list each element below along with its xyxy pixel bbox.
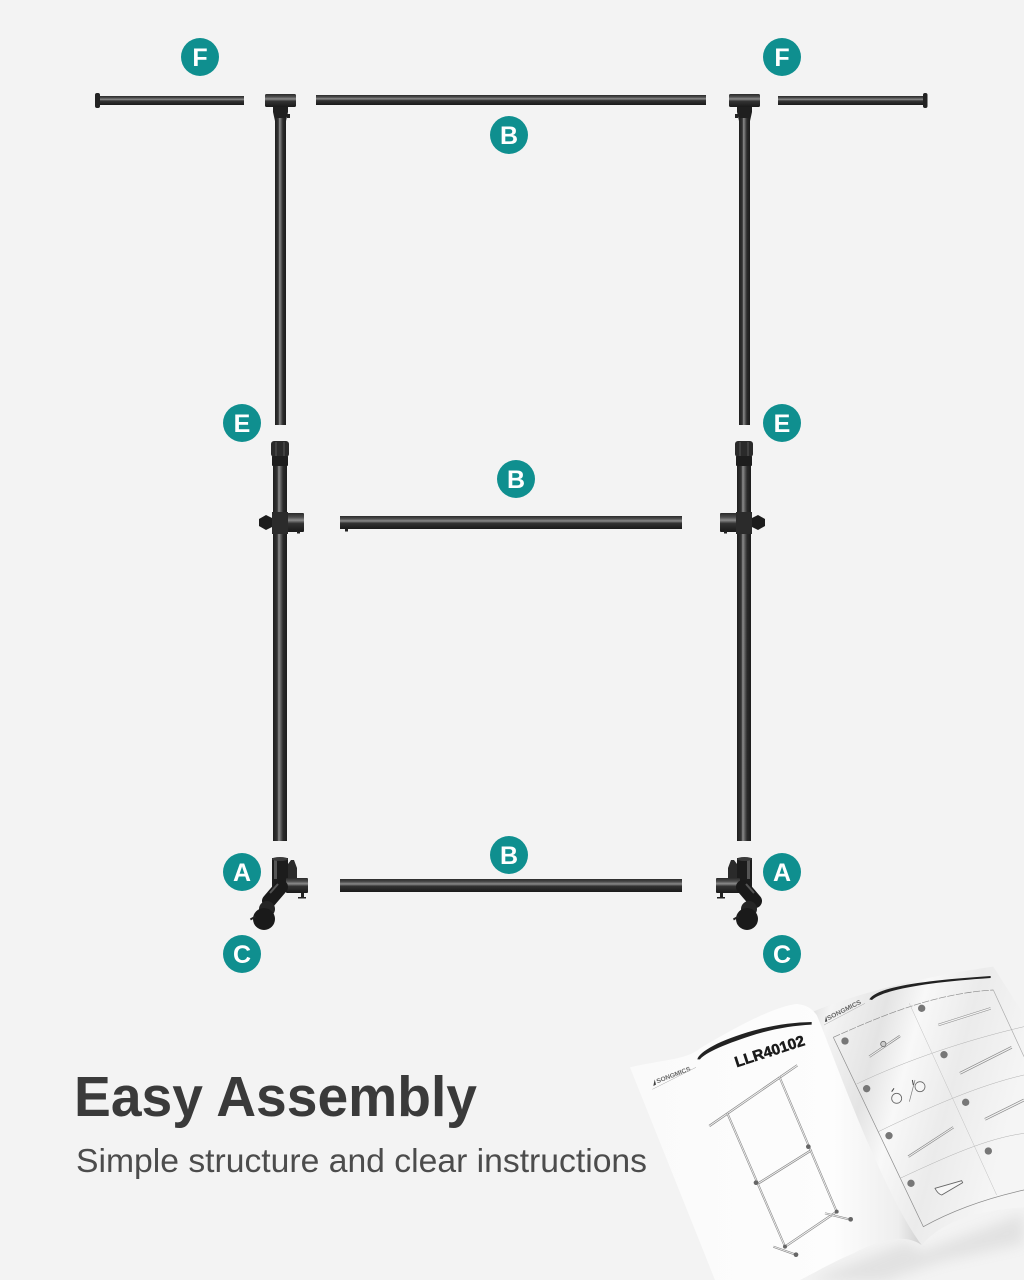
badge A right — [763, 853, 801, 891]
rack part F: left top extension — [95, 93, 244, 108]
rack part: right T joint — [729, 94, 760, 121]
badge E right: E — [774, 410, 790, 438]
badge A right: A — [773, 859, 791, 887]
badge B middle — [497, 460, 535, 498]
badge E right — [763, 404, 801, 442]
rack part: left lower pole with clamp — [259, 441, 304, 841]
badge E left — [223, 404, 261, 442]
badge B middle: B — [507, 466, 525, 494]
heading: Easy Assembly — [74, 1065, 477, 1129]
rack part F: right top extension — [778, 93, 928, 108]
booklet: left page: LLR40102 — [733, 1033, 807, 1071]
subheading: Simple structure and clear instructions — [76, 1142, 647, 1179]
badge B bottom: B — [500, 842, 518, 870]
badge F left — [181, 38, 219, 76]
badge A left: A — [233, 859, 251, 887]
badge A left — [223, 853, 261, 891]
rack part A and C: left base with wheel — [250, 857, 308, 930]
rack part: right lower pole with clamp — [720, 441, 765, 841]
rack part B: bottom rail — [340, 879, 682, 892]
badge B top — [490, 116, 528, 154]
badge C left: C — [233, 941, 251, 969]
instruction booklet — [630, 967, 1024, 1280]
badge F left: F — [192, 44, 208, 72]
booklet: left page: SONGMICS — [656, 1066, 692, 1085]
badge B top: B — [500, 122, 518, 150]
booklet: right page: SONGMICS — [826, 999, 863, 1022]
badge C right: C — [773, 941, 791, 969]
badge C left — [223, 935, 261, 973]
badge F right — [763, 38, 801, 76]
badge F right: F — [774, 44, 790, 72]
badge C right — [763, 935, 801, 973]
badge E left: E — [234, 410, 250, 438]
rack part B: middle rail — [340, 516, 682, 532]
badge B bottom — [490, 836, 528, 874]
rack part E: right upper pole — [739, 118, 750, 425]
booklet: right page — [813, 967, 1024, 1245]
rack part B: top rail — [316, 95, 706, 105]
rack part A and C: right base with wheel — [716, 857, 758, 930]
rack part E: left upper pole — [275, 118, 286, 425]
booklet: left page — [630, 1004, 922, 1280]
rack part: left T joint — [265, 94, 296, 121]
